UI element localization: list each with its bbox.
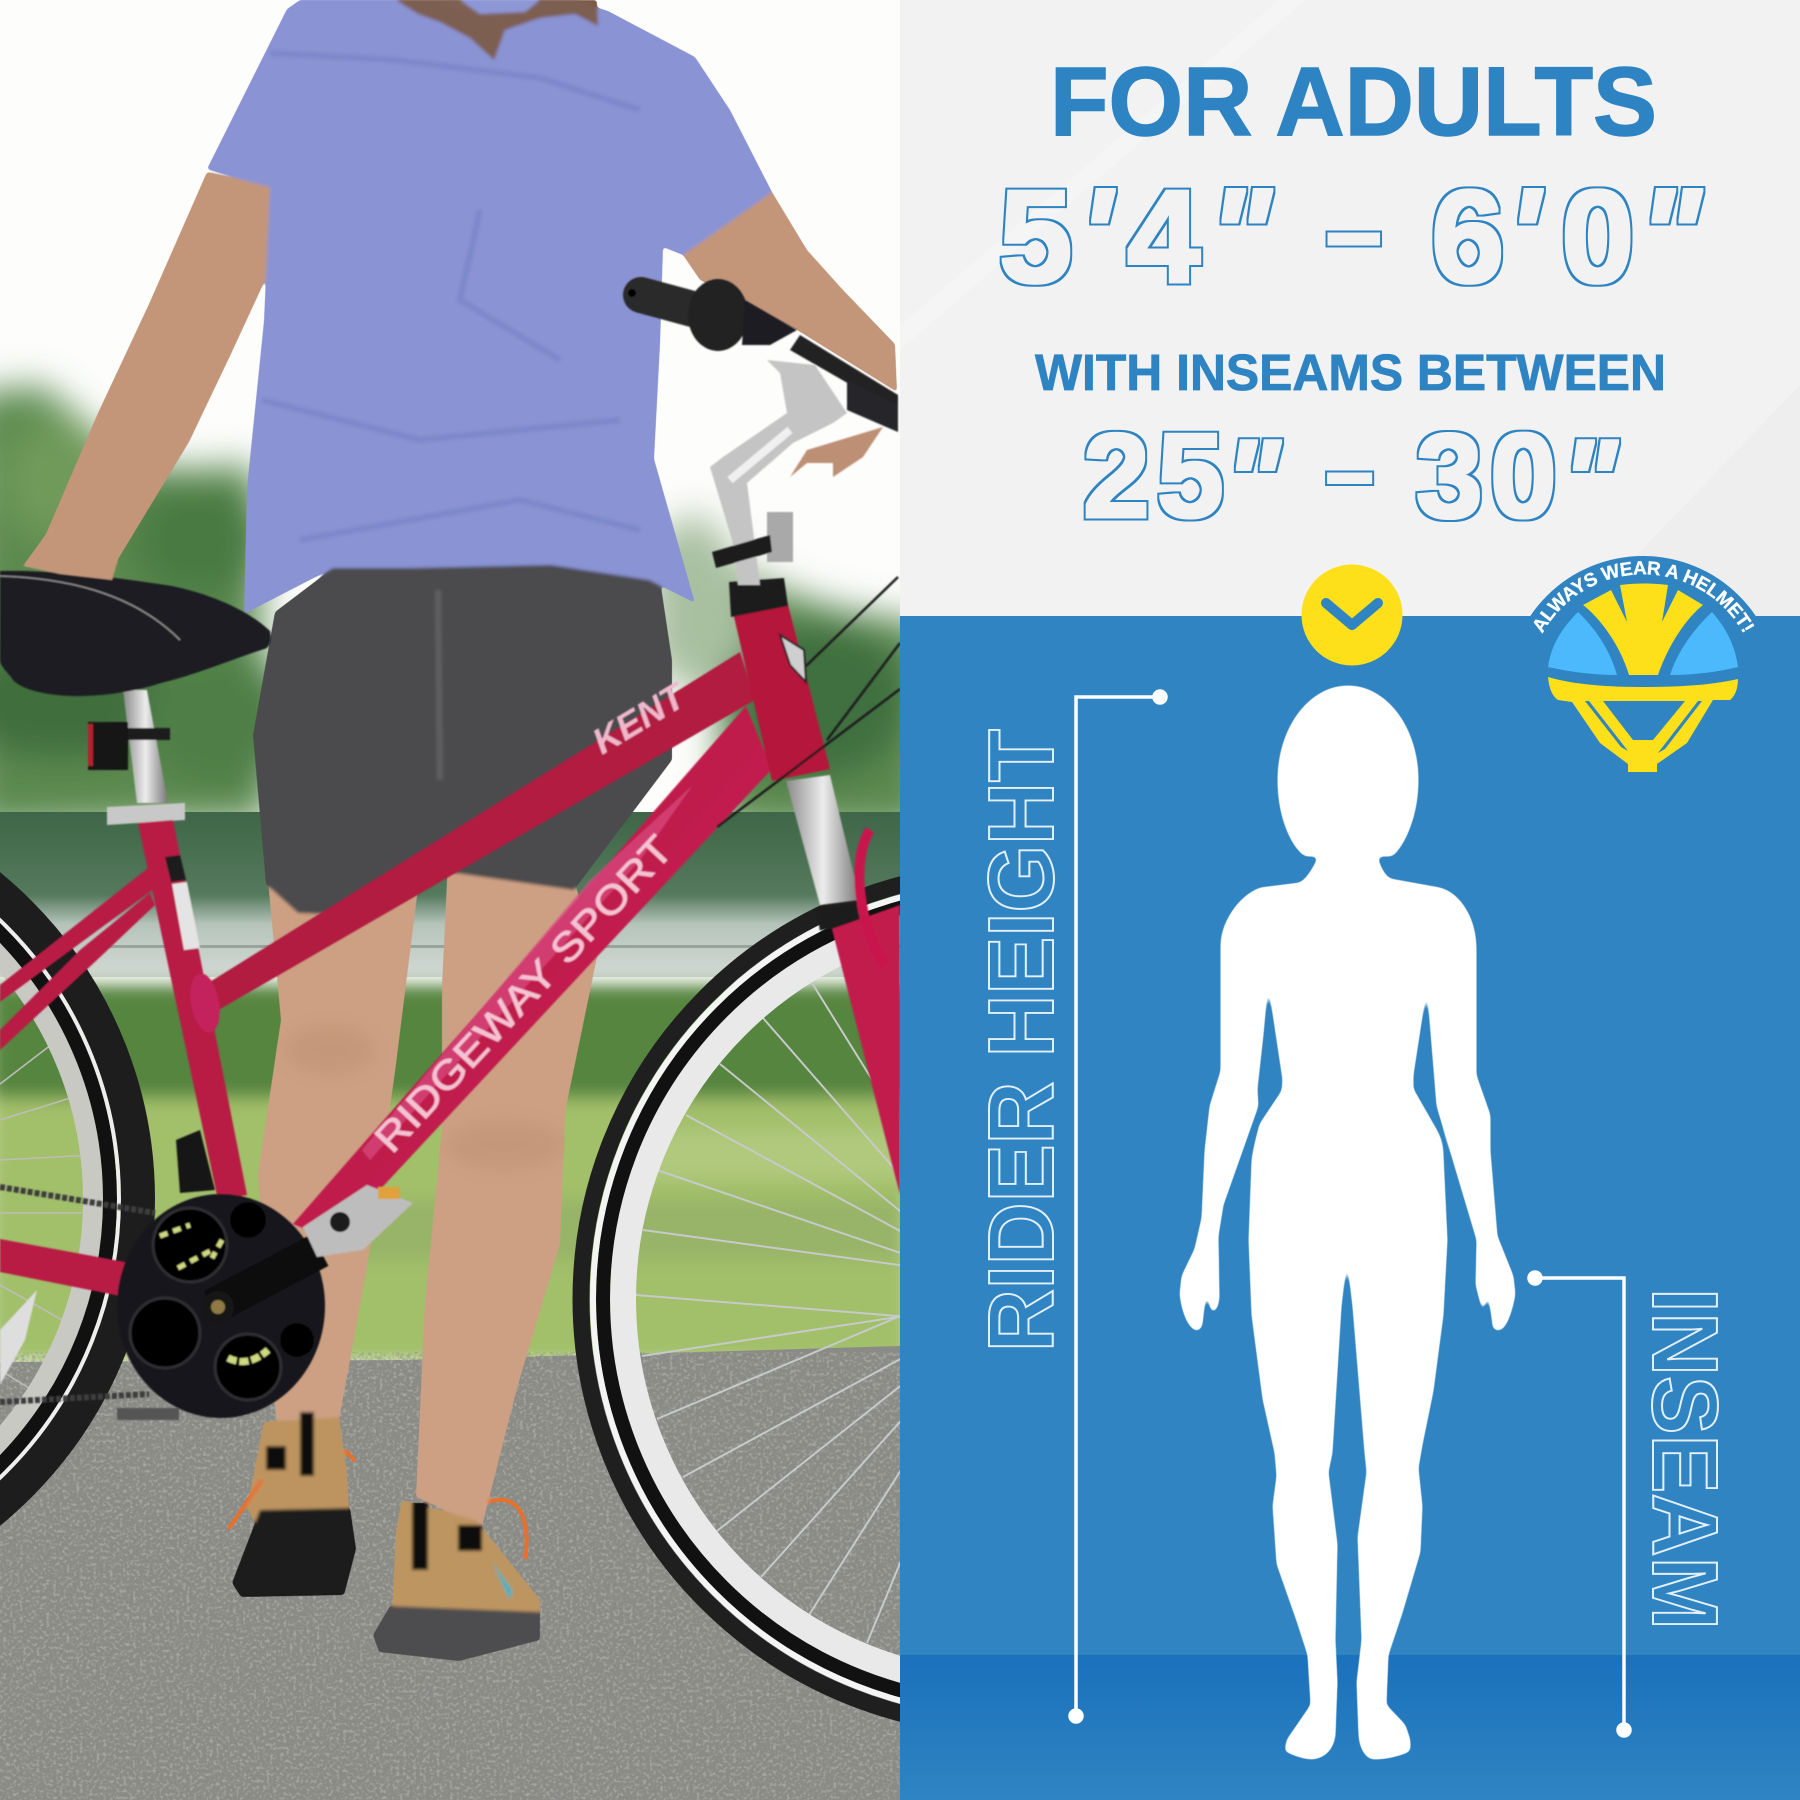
height range outline numbers: ' bbox=[1080, 161, 1115, 307]
inseam bracket bbox=[1529, 1272, 1630, 1736]
height range outline numbers: " bbox=[1639, 161, 1702, 307]
panel: bike photo bbox=[0, 0, 900, 1800]
height range outline numbers: 5 bbox=[999, 163, 1072, 310]
bike frame bbox=[0, 279, 900, 1420]
height range outline numbers: – bbox=[1326, 176, 1382, 288]
hand on saddle bbox=[23, 540, 118, 580]
label: rider height: RIDER HEIGHT bbox=[969, 729, 1073, 1352]
pedal bbox=[303, 1185, 413, 1257]
seat tube sticker bbox=[165, 855, 200, 950]
height range outline numbers: 4 bbox=[1127, 163, 1200, 310]
inseam range outline numbers: 2 bbox=[1083, 409, 1150, 543]
panel: top size information bbox=[900, 0, 1800, 616]
head tube bbox=[732, 597, 830, 781]
panel: blue silhouette area bbox=[900, 556, 1800, 1800]
leg shading bbox=[276, 1040, 564, 1159]
handlebar grip and brake lever bbox=[628, 279, 898, 432]
rider bbox=[23, 0, 897, 1661]
inseam range outline numbers: 0 bbox=[1490, 409, 1557, 543]
rear wheel bbox=[0, 794, 138, 1604]
reflector and clamp bbox=[712, 512, 793, 568]
height range outline numbers: 0 bbox=[1561, 163, 1634, 310]
arms bbox=[23, 172, 897, 574]
label: KENT: KENT bbox=[585, 674, 694, 762]
down tube bbox=[293, 706, 772, 1240]
label: inseam: INSEAM bbox=[1633, 1288, 1737, 1630]
collar bbox=[436, 0, 530, 14]
head badge bbox=[780, 635, 806, 682]
seat post bbox=[123, 690, 168, 803]
seat and chain stays bbox=[0, 868, 158, 1296]
subheading: with inseams between: WITH INSEAMS BETWEEN bbox=[1035, 344, 1666, 401]
label: RIDGEWAY SPORT: RIDGEWAY SPORT bbox=[366, 828, 682, 1161]
human silhouette bbox=[1180, 686, 1515, 1759]
fork bbox=[786, 775, 860, 905]
rider height bracket bbox=[1070, 691, 1166, 1722]
label: always wear a helmet: ALWAYS WEAR A HELMET! bbox=[1534, 561, 1754, 634]
hair bbox=[396, 0, 598, 60]
left shoe bbox=[228, 1412, 356, 1597]
photo background: sky, trees, water, grass, path bbox=[0, 354, 900, 1800]
icon: yellow chevron badge bbox=[1302, 564, 1402, 666]
inseam range outline numbers: " bbox=[1225, 417, 1281, 545]
top tube bbox=[205, 652, 755, 1012]
shorts bbox=[253, 565, 672, 915]
saddle bbox=[0, 571, 271, 696]
inseam range outline numbers: – bbox=[1326, 425, 1373, 520]
height range outline numbers: ' bbox=[1508, 161, 1543, 307]
cables bbox=[717, 577, 900, 827]
legs bbox=[258, 860, 597, 1526]
crank and chainring bbox=[0, 1130, 325, 1420]
shirt bbox=[207, 0, 772, 614]
hand fingers on brake bbox=[790, 427, 883, 477]
down tube graphic bbox=[362, 786, 692, 1160]
inseam range outline numbers: " bbox=[1562, 417, 1618, 545]
heading: for adults: FOR ADULTS bbox=[1050, 47, 1657, 156]
derailleur guard bbox=[0, 1290, 37, 1385]
height range outline numbers: " bbox=[1209, 161, 1272, 307]
right shoe bbox=[373, 1500, 540, 1661]
stem bbox=[710, 360, 847, 585]
inseam range outline numbers: 3 bbox=[1416, 409, 1483, 543]
tail light bbox=[88, 722, 170, 770]
inseam range outline numbers: 5 bbox=[1157, 409, 1224, 543]
front wheel bbox=[572, 876, 900, 1722]
icon: helmet badge bbox=[1530, 556, 1756, 772]
seat tube bbox=[138, 820, 247, 1200]
height range outline numbers: 6 bbox=[1431, 163, 1504, 310]
